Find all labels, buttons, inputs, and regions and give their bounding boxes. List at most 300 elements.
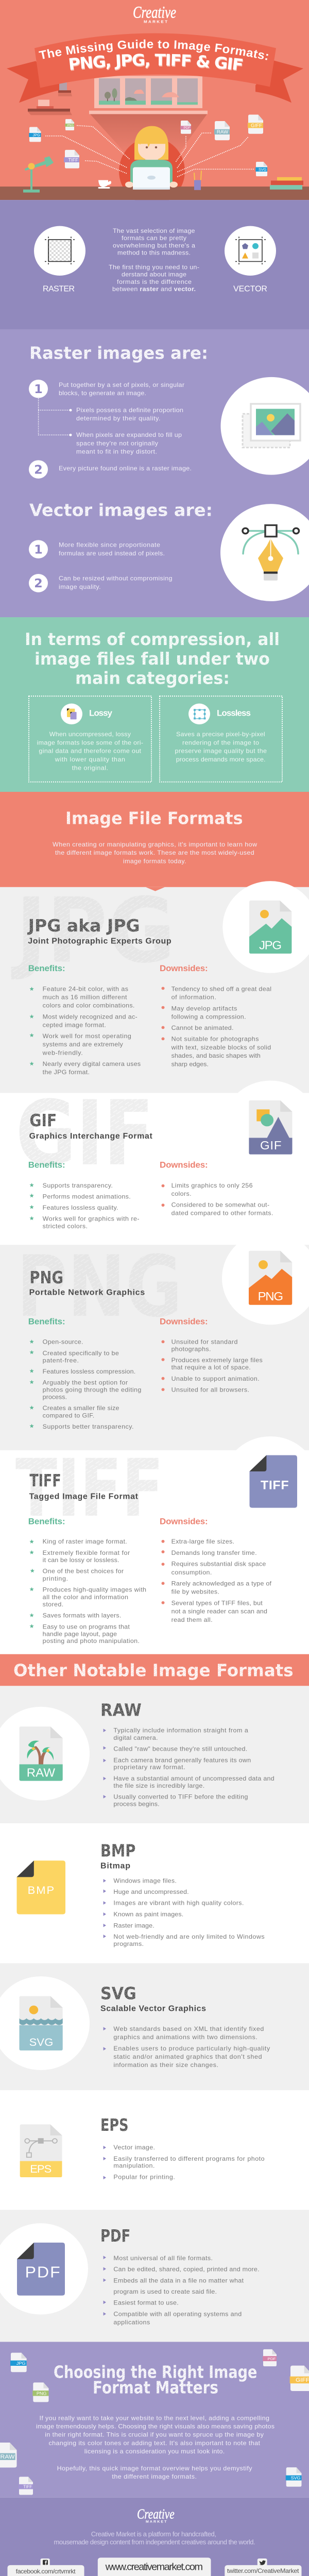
- icon: PDF file: PDF: [25, 2263, 60, 2281]
- benefits list: [29, 1338, 142, 1430]
- file icon: RAW: RAW: [1, 2454, 15, 2460]
- heading: RAW: RAW: [100, 1700, 142, 1720]
- downsides list: with text, sizeable blocks of solid: [171, 1044, 271, 1051]
- facebook link: facebook.com/crtvmrkt: [16, 2568, 76, 2575]
- downsides list: Unsuited for all browsers.: [171, 1386, 249, 1394]
- raster sub point 1: Pixels possess a definite proportion: [76, 406, 183, 414]
- icon: lossless: [188, 704, 210, 724]
- benefits list: Creates a smaller file size: [43, 1404, 119, 1412]
- number badge 2: 2: [34, 577, 43, 590]
- raster sub point 1: determined by their quality.: [76, 415, 161, 422]
- icon: EPS file: EPS: [30, 2162, 52, 2175]
- website link: www.creativemarket.com: [105, 2562, 203, 2572]
- file icon: PNG: PNG: [37, 2391, 47, 2396]
- lossy text: with lower quality than: [55, 756, 125, 763]
- heading: compression: [25, 630, 280, 688]
- subheading: Scalable Vector Graphics: [100, 2005, 206, 2013]
- lossless text: [175, 731, 267, 763]
- downsides list: May develop artifacts: [171, 1005, 237, 1012]
- benefits list: colors and color combinations.: [43, 1002, 134, 1009]
- file icon: PDF: [263, 2349, 277, 2366]
- icon: GIF file: [249, 1100, 293, 1155]
- icon: PDF file: [0, 2223, 88, 2314]
- number badge 2: [29, 574, 48, 592]
- subheading: Portable Network Graphics: [29, 1289, 145, 1297]
- downsides list: consumption.: [171, 1569, 212, 1576]
- benefits list: One of the best choices for: [43, 1568, 124, 1575]
- lossy text: ginal data and therefore come out: [39, 748, 142, 755]
- icon: vector circle: [225, 226, 276, 276]
- benefits list: Performs modest animations.: [43, 1193, 131, 1200]
- intro text: between raster and vector.: [112, 285, 196, 293]
- benefits heading: Benefits:: [28, 1160, 65, 1170]
- icon: JPG file: [222, 881, 309, 973]
- closing text: in their right format. This is crucial if you want to spruce up the image by: [45, 2431, 264, 2438]
- intro text: derstand about image: [122, 271, 186, 278]
- BMP list: Huge and uncompressed.: [113, 1888, 189, 1895]
- benefits list: Easy to use on programs that: [43, 1623, 130, 1630]
- benefits list: compared to GIF.: [43, 1412, 94, 1419]
- file icon: SVG: SVG: [259, 167, 267, 172]
- window: [94, 76, 202, 108]
- panel: compression: [0, 617, 309, 792]
- heading: BMP: BMP: [100, 1841, 135, 1860]
- icon: PNG file: [222, 1231, 309, 1325]
- closing text: If you really want to take your website to the next level, adding a compelling: [39, 2415, 269, 2421]
- lossless text: Saves a precise pixel-by-pixel: [176, 731, 265, 738]
- benefits list: the JPG format.: [43, 1069, 90, 1076]
- file icon: TIFF: [19, 2477, 33, 2495]
- EPS list: Popular for printing.: [113, 2174, 175, 2181]
- downsides list: Considered to be somewhat out-: [171, 1201, 269, 1209]
- benefits list: stored.: [43, 1601, 63, 1608]
- subheading: Tagged Image File Format: [29, 1493, 139, 1501]
- heading: PNG: PNG: [29, 1268, 63, 1287]
- dotted tree connector: [39, 398, 72, 436]
- downsides list: photographs.: [171, 1346, 211, 1353]
- file icon: GIFF: [248, 114, 263, 134]
- website link: [98, 2557, 211, 2576]
- closing text: [36, 2415, 274, 2480]
- intro text: image formats today.: [123, 858, 186, 865]
- icon: BMP file: BMP: [28, 1884, 54, 1896]
- title banner: [7, 33, 303, 103]
- heading: choosing the right format: Format Matters: [93, 2378, 218, 2397]
- raster sub point 1: [76, 406, 183, 422]
- benefits list: [29, 986, 141, 1076]
- icon: raster circle: [34, 226, 85, 276]
- heading: TIFF: TIFF: [29, 1471, 61, 1490]
- benefits list: [29, 1538, 146, 1645]
- benefits list: Works well for graphics with re-: [43, 1215, 140, 1223]
- file icon: GIFF: [290, 2366, 309, 2391]
- about text: mousemade design content from independent creatives around the world.: [54, 2538, 255, 2546]
- file icon: PNG: PNG: [67, 124, 74, 127]
- panel: BMP: [0, 1823, 309, 1963]
- heading: EPS: EPS: [100, 2115, 129, 2135]
- EPS list: Vector image.: [113, 2144, 155, 2151]
- lossless text: process demands more space.: [176, 756, 266, 763]
- PDF list: Most universal of all file formats.: [113, 2255, 213, 2262]
- file icon: TIFF: TIFF: [23, 2484, 32, 2489]
- logo: Creative Market: Creative: [137, 2506, 175, 2522]
- intro text: The vast selection of image: [113, 227, 195, 234]
- downsides list: Several types of TIFF files, but: [171, 1600, 263, 1606]
- icon: pencil cup: [194, 171, 201, 190]
- heading: GIF: GIF: [29, 1111, 57, 1130]
- stack of books: [270, 177, 303, 190]
- benefits list: printing.: [43, 1575, 68, 1582]
- intro text: [53, 841, 257, 865]
- logo: Creative Market: Creative: [133, 3, 176, 22]
- benefits list: cepted image format.: [43, 1022, 106, 1028]
- watermark letters: PNG: [16, 1238, 182, 1336]
- SVG list: Enables users to produce particularly high-quality: [113, 2045, 270, 2052]
- heading: choosing the right format: Choosing the Right Image: [54, 2362, 257, 2382]
- PDF list: applications: [113, 2319, 150, 2326]
- downsides list: Not suitable for photographs: [171, 1036, 259, 1043]
- heading: Other Notable Image Formats: Other Notable Image Formats: [13, 1660, 294, 1680]
- logo: Creative Market: [137, 2506, 175, 2523]
- benefits list: process.: [43, 1394, 67, 1401]
- RAW list: the file size is incredibly large.: [113, 1782, 204, 1789]
- file icon: JPG: [29, 127, 41, 142]
- benefits list: Work well for most operating: [43, 1032, 131, 1040]
- raster point 1: blocks, to generate an image.: [59, 389, 146, 397]
- panel: EPS: [0, 2090, 309, 2210]
- raster point 2: Every picture found online is a raster image.: [59, 465, 192, 472]
- panel: hero: [0, 0, 309, 200]
- subheading: Joint Photographic Experts Group: [28, 937, 171, 945]
- BMP list: Raster image.: [113, 1922, 154, 1929]
- panel: SVG: [0, 1963, 309, 2090]
- file icon: RAW: [0, 2443, 16, 2467]
- icon: JPG file: JPG: [259, 939, 282, 952]
- lossless text: preserve image quality but the: [175, 748, 267, 755]
- heading: Vector images are: Vector images are:: [29, 500, 213, 520]
- shelves: [28, 82, 72, 115]
- downsides heading: Downsides:: [160, 963, 208, 973]
- EPS list: Easily transferred to different programs for photo: [113, 2155, 265, 2162]
- heading: Image File Formats: Image File Formats: [65, 808, 243, 828]
- number badge 1: [29, 540, 48, 558]
- number badge 2: 2: [34, 463, 43, 477]
- downsides list: colors.: [171, 1190, 192, 1197]
- label: RASTER: RASTER: [43, 285, 75, 293]
- icon: pen tool circle: [220, 504, 309, 601]
- downsides list: Rarely acknowledged as a type of: [171, 1580, 272, 1587]
- panel: RAW: [0, 1686, 309, 1823]
- lossy text: the original.: [72, 765, 108, 771]
- benefits list: systems and are extremely: [43, 1041, 124, 1048]
- downsides list: shades, and basic shapes with: [171, 1052, 261, 1059]
- window sill and shadow: [89, 111, 208, 159]
- intro text: formats can be pretty: [122, 234, 187, 242]
- benefits list: patent-free.: [43, 1357, 79, 1364]
- title line 2: PNG, JPG, TIFF & GIF: [69, 54, 243, 71]
- intro text: When creating or manipulating graphics, it's important to learn how: [53, 841, 257, 848]
- panel: choosing the right format: [0, 2342, 309, 2498]
- downsides list: Limits graphics to only 256: [171, 1182, 253, 1189]
- intro text: The first thing you need to un-: [109, 264, 199, 271]
- panel: GIF: [0, 1080, 309, 1245]
- file icon: SVG: [255, 162, 267, 176]
- logo: Creative Market: MARKET: [144, 19, 167, 24]
- lossy text: [37, 731, 143, 771]
- RAW list: Called "raw" because they're still untouched.: [113, 1745, 247, 1752]
- heading: PDF: PDF: [100, 2226, 130, 2246]
- panel: PNG: [0, 1231, 309, 1450]
- downsides list: Extra-large file sizes.: [171, 1538, 234, 1545]
- heading: JPG aka JPG: JPG aka JPG: [27, 916, 140, 936]
- benefits heading: Benefits:: [28, 1317, 65, 1327]
- EPS list: [104, 2144, 265, 2181]
- PDF list: Compatible with all operating systems and: [113, 2311, 242, 2317]
- downsides list: dated compared to other formats.: [171, 1210, 273, 1217]
- file icon: PDF: PDF: [268, 2357, 276, 2361]
- file icon: RAW: RAW: [217, 129, 228, 135]
- number badge 1: 1: [34, 543, 43, 556]
- watermark letters: JPG: [11, 878, 176, 983]
- heading: choosing the right format: [54, 2362, 257, 2397]
- file icon: PDF: [180, 121, 191, 134]
- file icon: RAW: [214, 121, 230, 140]
- icon: lossy: [61, 704, 82, 724]
- logo: Creative Market: MARKET: [146, 2520, 167, 2523]
- BMP list: Images are vibrant with high quality colors.: [113, 1900, 244, 1907]
- panel: PDF: [0, 2210, 309, 2342]
- vector point 2: Can be resized without compromising: [59, 575, 173, 582]
- vector point 1: formulas are used instead of pixels.: [59, 550, 165, 557]
- icon: coffee cup: [98, 180, 111, 189]
- RAW list: Each camera brand generally features its own: [113, 1757, 251, 1764]
- RAW list: Have a substantial amount of uncompressed data and: [113, 1775, 274, 1782]
- benefits list: all the color and information: [43, 1594, 128, 1601]
- PDF list: [104, 2255, 260, 2326]
- file icon: PDF: PDF: [183, 126, 191, 130]
- downsides list: Demands long transfer time.: [171, 1549, 257, 1556]
- facebook link: [7, 2558, 84, 2576]
- file icon: GIFF: GIFF: [251, 123, 262, 129]
- benefits list: Saves formats with layers.: [43, 1612, 121, 1619]
- watermark letters: TIFF: [15, 1443, 164, 1535]
- heading: Raster images are: Raster images are:: [29, 343, 208, 363]
- downsides heading: Downsides:: [160, 1317, 208, 1327]
- file icon: SVG: SVG: [291, 2476, 301, 2481]
- icon: TIFF file: [249, 1455, 297, 1508]
- icon: raster image circle: [220, 377, 309, 475]
- benefits list: Nearly every digital camera uses: [43, 1060, 141, 1067]
- number badge 1: 1: [34, 382, 43, 396]
- closing text: licensing is a consideration you must look into.: [84, 2448, 225, 2455]
- downsides list: sharp edges.: [171, 1061, 209, 1067]
- number badge 2: [29, 460, 48, 479]
- BMP list: Windows image files.: [113, 1877, 177, 1885]
- about text: [54, 2530, 255, 2546]
- card: lossless: [160, 696, 282, 782]
- downsides list: Tendency to shed off a great deal: [171, 986, 271, 992]
- benefits list: Supports better transparency.: [43, 1423, 134, 1430]
- closing text: the different image formats.: [112, 2473, 197, 2480]
- panel: raster vs vector intro: [0, 200, 309, 329]
- closing text: Hopefully, this quick image format overview helps you demystify: [57, 2465, 252, 2472]
- icon: RAW file: RAW: [27, 1766, 56, 1779]
- banner: other notable formats: [0, 1654, 309, 1686]
- EPS list: manipulation.: [113, 2162, 154, 2170]
- RAW list: [104, 1727, 274, 1807]
- file icon: SVG: [286, 2467, 301, 2487]
- raster point 1: Put together by a set of pixels, or singular: [59, 381, 184, 388]
- benefits list: it can be lossy or lossless.: [43, 1556, 119, 1564]
- benefits list: Open-source.: [43, 1338, 83, 1345]
- downsides list: [162, 986, 271, 1067]
- benefits list: [29, 1182, 140, 1230]
- benefits list: Supports transparency.: [43, 1182, 113, 1189]
- downsides list: Produces extremely large files: [171, 1357, 263, 1364]
- downsides heading: Downsides:: [160, 1517, 208, 1527]
- downsides heading: Downsides:: [160, 1160, 208, 1170]
- panel: footer: [0, 2498, 309, 2576]
- icon: EPS file: [20, 2124, 62, 2177]
- downsides list: following a compression.: [171, 1013, 246, 1020]
- vector point 2: [59, 575, 173, 590]
- intro text: [109, 227, 199, 293]
- label: VECTOR: VECTOR: [233, 285, 267, 293]
- file icon: PNG: [32, 2382, 49, 2402]
- SVG list: Web standards based on XML that identify fixed: [113, 2025, 264, 2032]
- benefits list: handle page layout, page: [43, 1631, 117, 1637]
- lossy text: image formats lose some of the ori-: [37, 739, 143, 746]
- BMP list: Not web-friendly and are only limited to Windows: [113, 1933, 265, 1940]
- lossless text: rendering of the image to: [182, 739, 259, 746]
- raster point 1: [59, 381, 184, 397]
- laptop: [125, 167, 178, 190]
- vector point 1: More flexible since proportionate: [59, 541, 160, 548]
- panel: JPG: [0, 878, 309, 1093]
- downsides list: Cannot be animated.: [171, 1024, 234, 1031]
- person: [119, 126, 185, 205]
- downsides list: not a single reader can scan and: [171, 1608, 267, 1615]
- label: Lossless: Lossless: [217, 708, 251, 718]
- benefits list: photos going through the editing: [43, 1386, 142, 1394]
- file icon: TIFF: TIFF: [68, 157, 79, 162]
- panel: image file formats intro: [0, 792, 309, 887]
- closing text: image tremendously helps. Choosing the right visuals also means saving photos: [36, 2423, 274, 2430]
- benefits list: stricted colors.: [43, 1223, 88, 1230]
- heading: compression: main categories:: [75, 668, 230, 688]
- raster sub point 2: space they're not originally: [76, 440, 159, 447]
- RAW list: Usually converted to TIFF before the editing: [113, 1793, 248, 1801]
- RAW list: process begins.: [113, 1801, 160, 1807]
- benefits list: Features lossless quality.: [43, 1204, 118, 1211]
- dotted connectors: [46, 126, 253, 177]
- PDF list: Can be edited, shared, copied, printed and more.: [113, 2266, 260, 2273]
- benefits list: Extremely flexible format for: [43, 1549, 130, 1556]
- watermark letters: GIF: [16, 1081, 154, 1185]
- benefits list: Produces high-quality images with: [43, 1586, 146, 1593]
- lossy text: When uncompressed, lossy: [49, 731, 131, 738]
- benefits list: Arguably the best option for: [43, 1379, 128, 1386]
- icon: BMP file: [16, 1860, 65, 1914]
- icon: SVG file: SVG: [29, 2036, 53, 2048]
- about text: Creative Market is a platform for handcrafted,: [91, 2530, 216, 2538]
- card: lossy: [29, 696, 151, 782]
- SVG list: static and/or animated graphics that don't shed: [113, 2053, 262, 2060]
- PDF list: program is used to create said file.: [113, 2288, 217, 2295]
- SVG list: [104, 2025, 270, 2069]
- file icon: JPG: JPG: [32, 133, 40, 138]
- label: Lossy: Lossy: [89, 708, 113, 718]
- benefits list: posting and photo manipulation.: [43, 1637, 140, 1645]
- raster sub point 2: When pixels are expanded to fill up: [76, 431, 182, 438]
- benefits list: Feature 24-bit color, with as: [43, 986, 128, 992]
- downsides list: [162, 1538, 272, 1623]
- BMP list: Known as paint images.: [113, 1911, 183, 1918]
- heading: SVG: SVG: [100, 1984, 136, 2003]
- subheading: Bitmap: [100, 1862, 130, 1871]
- title line 1: The Missing Guide to Image Formats:: [39, 39, 268, 60]
- icon: PNG file: PNG: [258, 1290, 283, 1303]
- RAW list: Typically include information straight from a: [113, 1727, 248, 1734]
- intro text: the different image formats work. These are the most widely-used: [55, 849, 254, 856]
- benefits list: King of raster image format.: [43, 1538, 127, 1545]
- downsides list: file by websites.: [171, 1588, 219, 1595]
- desk: [0, 187, 309, 200]
- vector point 2: image quality.: [59, 583, 101, 590]
- number badge 1: [29, 380, 48, 398]
- icon: GIF file: GIF: [260, 1139, 281, 1152]
- BMP list: [104, 1877, 265, 1947]
- benefits list: Features lossless compression.: [43, 1368, 135, 1375]
- RAW list: proprietary raw format.: [113, 1764, 185, 1771]
- downsides list: that require a lot of space.: [171, 1364, 251, 1371]
- file icon: JPG: JPG: [16, 2361, 26, 2366]
- closing text: changing its color tones or adding text. It's also important to note that: [48, 2439, 261, 2447]
- intro text: formats is the difference: [117, 278, 192, 285]
- panel: raster and vector definitions: [0, 329, 309, 617]
- PDF list: Embeds all the data in a file no matter what: [113, 2277, 244, 2284]
- downsides list: Unsuited for standard: [171, 1338, 238, 1345]
- benefits list: Most widely recognized and ac-: [43, 1013, 138, 1020]
- icon: desk lamp: [23, 156, 54, 193]
- SVG list: graphics and animations with two dimensions.: [113, 2033, 258, 2041]
- BMP list: programs.: [113, 1940, 144, 1947]
- file icon: JPG: [10, 2353, 27, 2372]
- vector point 1: [59, 541, 165, 557]
- twitter link: [225, 2558, 302, 2576]
- icon: RAW file: [0, 1707, 90, 1801]
- downsides list: Requires substantial disk space: [171, 1561, 266, 1568]
- downsides list: of information.: [171, 994, 216, 1001]
- file icon: TIFF: [64, 150, 79, 168]
- raster sub point 2: [76, 431, 182, 455]
- benefits heading: Benefits:: [28, 963, 65, 973]
- benefits list: much as 16 million different: [43, 994, 127, 1001]
- downsides list: Unable to support animation.: [171, 1375, 260, 1382]
- heading: compression: In terms of compression, all: [25, 630, 280, 649]
- SVG list: information as their size changes.: [113, 2061, 218, 2069]
- heading: compression: image files fall under two: [35, 649, 270, 669]
- RAW list: digital camera.: [113, 1734, 158, 1741]
- twitter link: twitter.com/CreativeMarket: [227, 2567, 299, 2574]
- intro text: overwhelming but there's a: [113, 242, 195, 249]
- logo: Creative Market: [133, 3, 176, 24]
- icon: SVG file: [0, 1976, 90, 2070]
- raster sub point 2: meant to fit in they distort.: [76, 448, 157, 455]
- PDF list: Easiest format to use.: [113, 2299, 179, 2306]
- file icon: PNG: [65, 119, 74, 130]
- benefits heading: Benefits:: [28, 1517, 65, 1527]
